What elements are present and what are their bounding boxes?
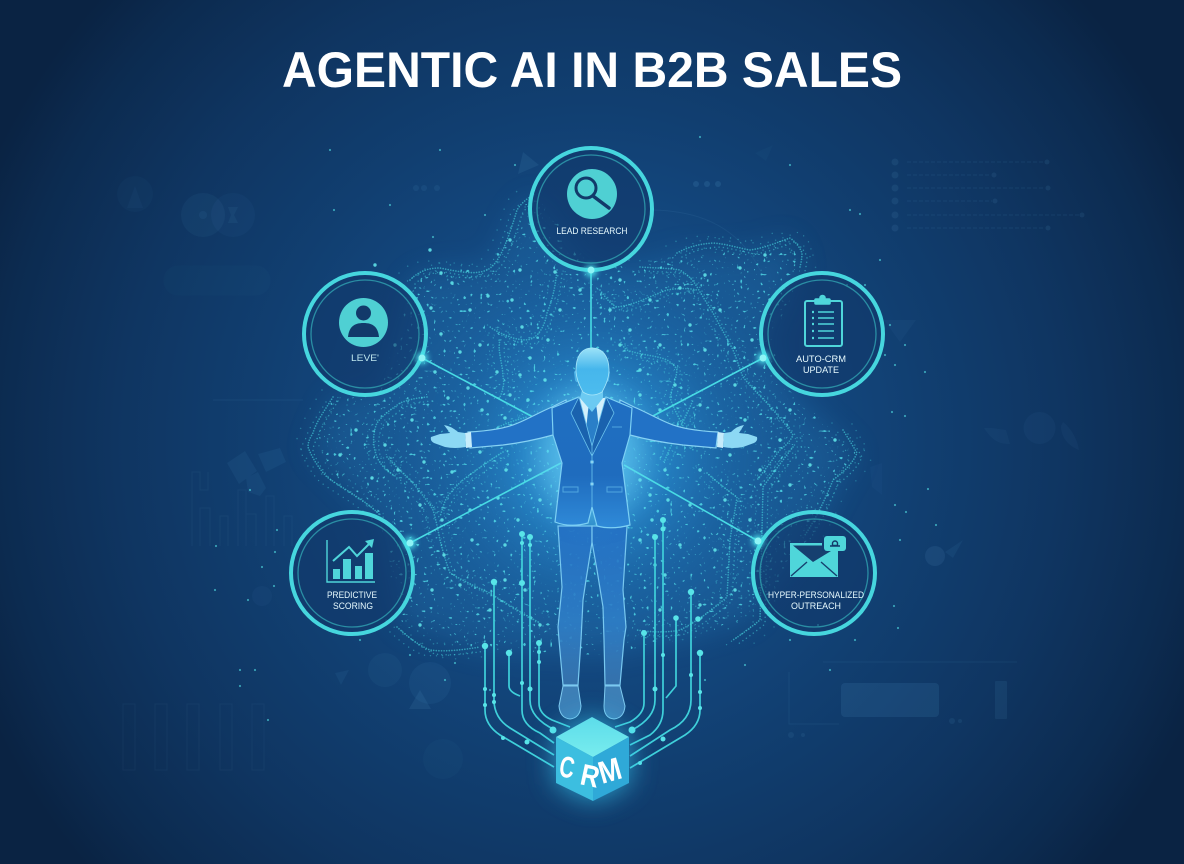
legs: [558, 526, 627, 685]
circle: hyper-personalized outreach: [753, 512, 875, 634]
central glow: [391, 265, 791, 645]
figure glow: [539, 389, 643, 521]
label: LEAD RESEARCH: [556, 226, 628, 237]
head and neck: [574, 348, 610, 412]
faint background graphics: [117, 145, 1084, 779]
agent figure: [431, 348, 757, 719]
circle: lead research: [530, 148, 652, 270]
label: UPDATE: [803, 365, 839, 376]
circle: lead: [304, 273, 426, 395]
hands: [431, 425, 757, 448]
connector lines: [410, 271, 763, 543]
pockets and buttons: [563, 427, 622, 507]
cube glow: [556, 717, 629, 801]
shoes: [559, 686, 625, 719]
cuffs: [465, 432, 724, 448]
particle network cloud: [215, 137, 936, 720]
icon: envelope: [790, 536, 846, 577]
CRM label: M: [594, 751, 626, 791]
icon: person: [339, 298, 388, 347]
title: AGENTIC AI IN B2B SALES: [282, 42, 902, 98]
right arm: [616, 400, 718, 448]
CRM label: R: [578, 758, 603, 794]
jacket: [552, 397, 632, 528]
connector nodes: [404, 265, 769, 549]
label: LEVE': [351, 353, 379, 364]
CRM circuit traces: [482, 517, 703, 768]
circle: predictive scoring: [291, 512, 413, 634]
icon: magnifier: [567, 169, 617, 219]
label: [796, 354, 846, 376]
label: [327, 590, 377, 612]
shirt and tie: [571, 397, 614, 456]
circle: auto crm update: [761, 273, 883, 395]
label: SCORING: [333, 601, 373, 612]
CRM label: [557, 751, 626, 794]
label: [768, 590, 864, 612]
label: PREDICTIVE: [327, 590, 377, 601]
icon: chart: [327, 539, 375, 582]
label: AUTO-CRM: [796, 354, 846, 365]
icon: clipboard: [805, 296, 842, 346]
label: HYPER-PERSONALIZED: [768, 590, 864, 601]
left arm: [468, 400, 570, 448]
CRM cube: [556, 717, 629, 801]
label: OUTREACH: [791, 601, 841, 612]
CRM label: C: [557, 751, 577, 785]
